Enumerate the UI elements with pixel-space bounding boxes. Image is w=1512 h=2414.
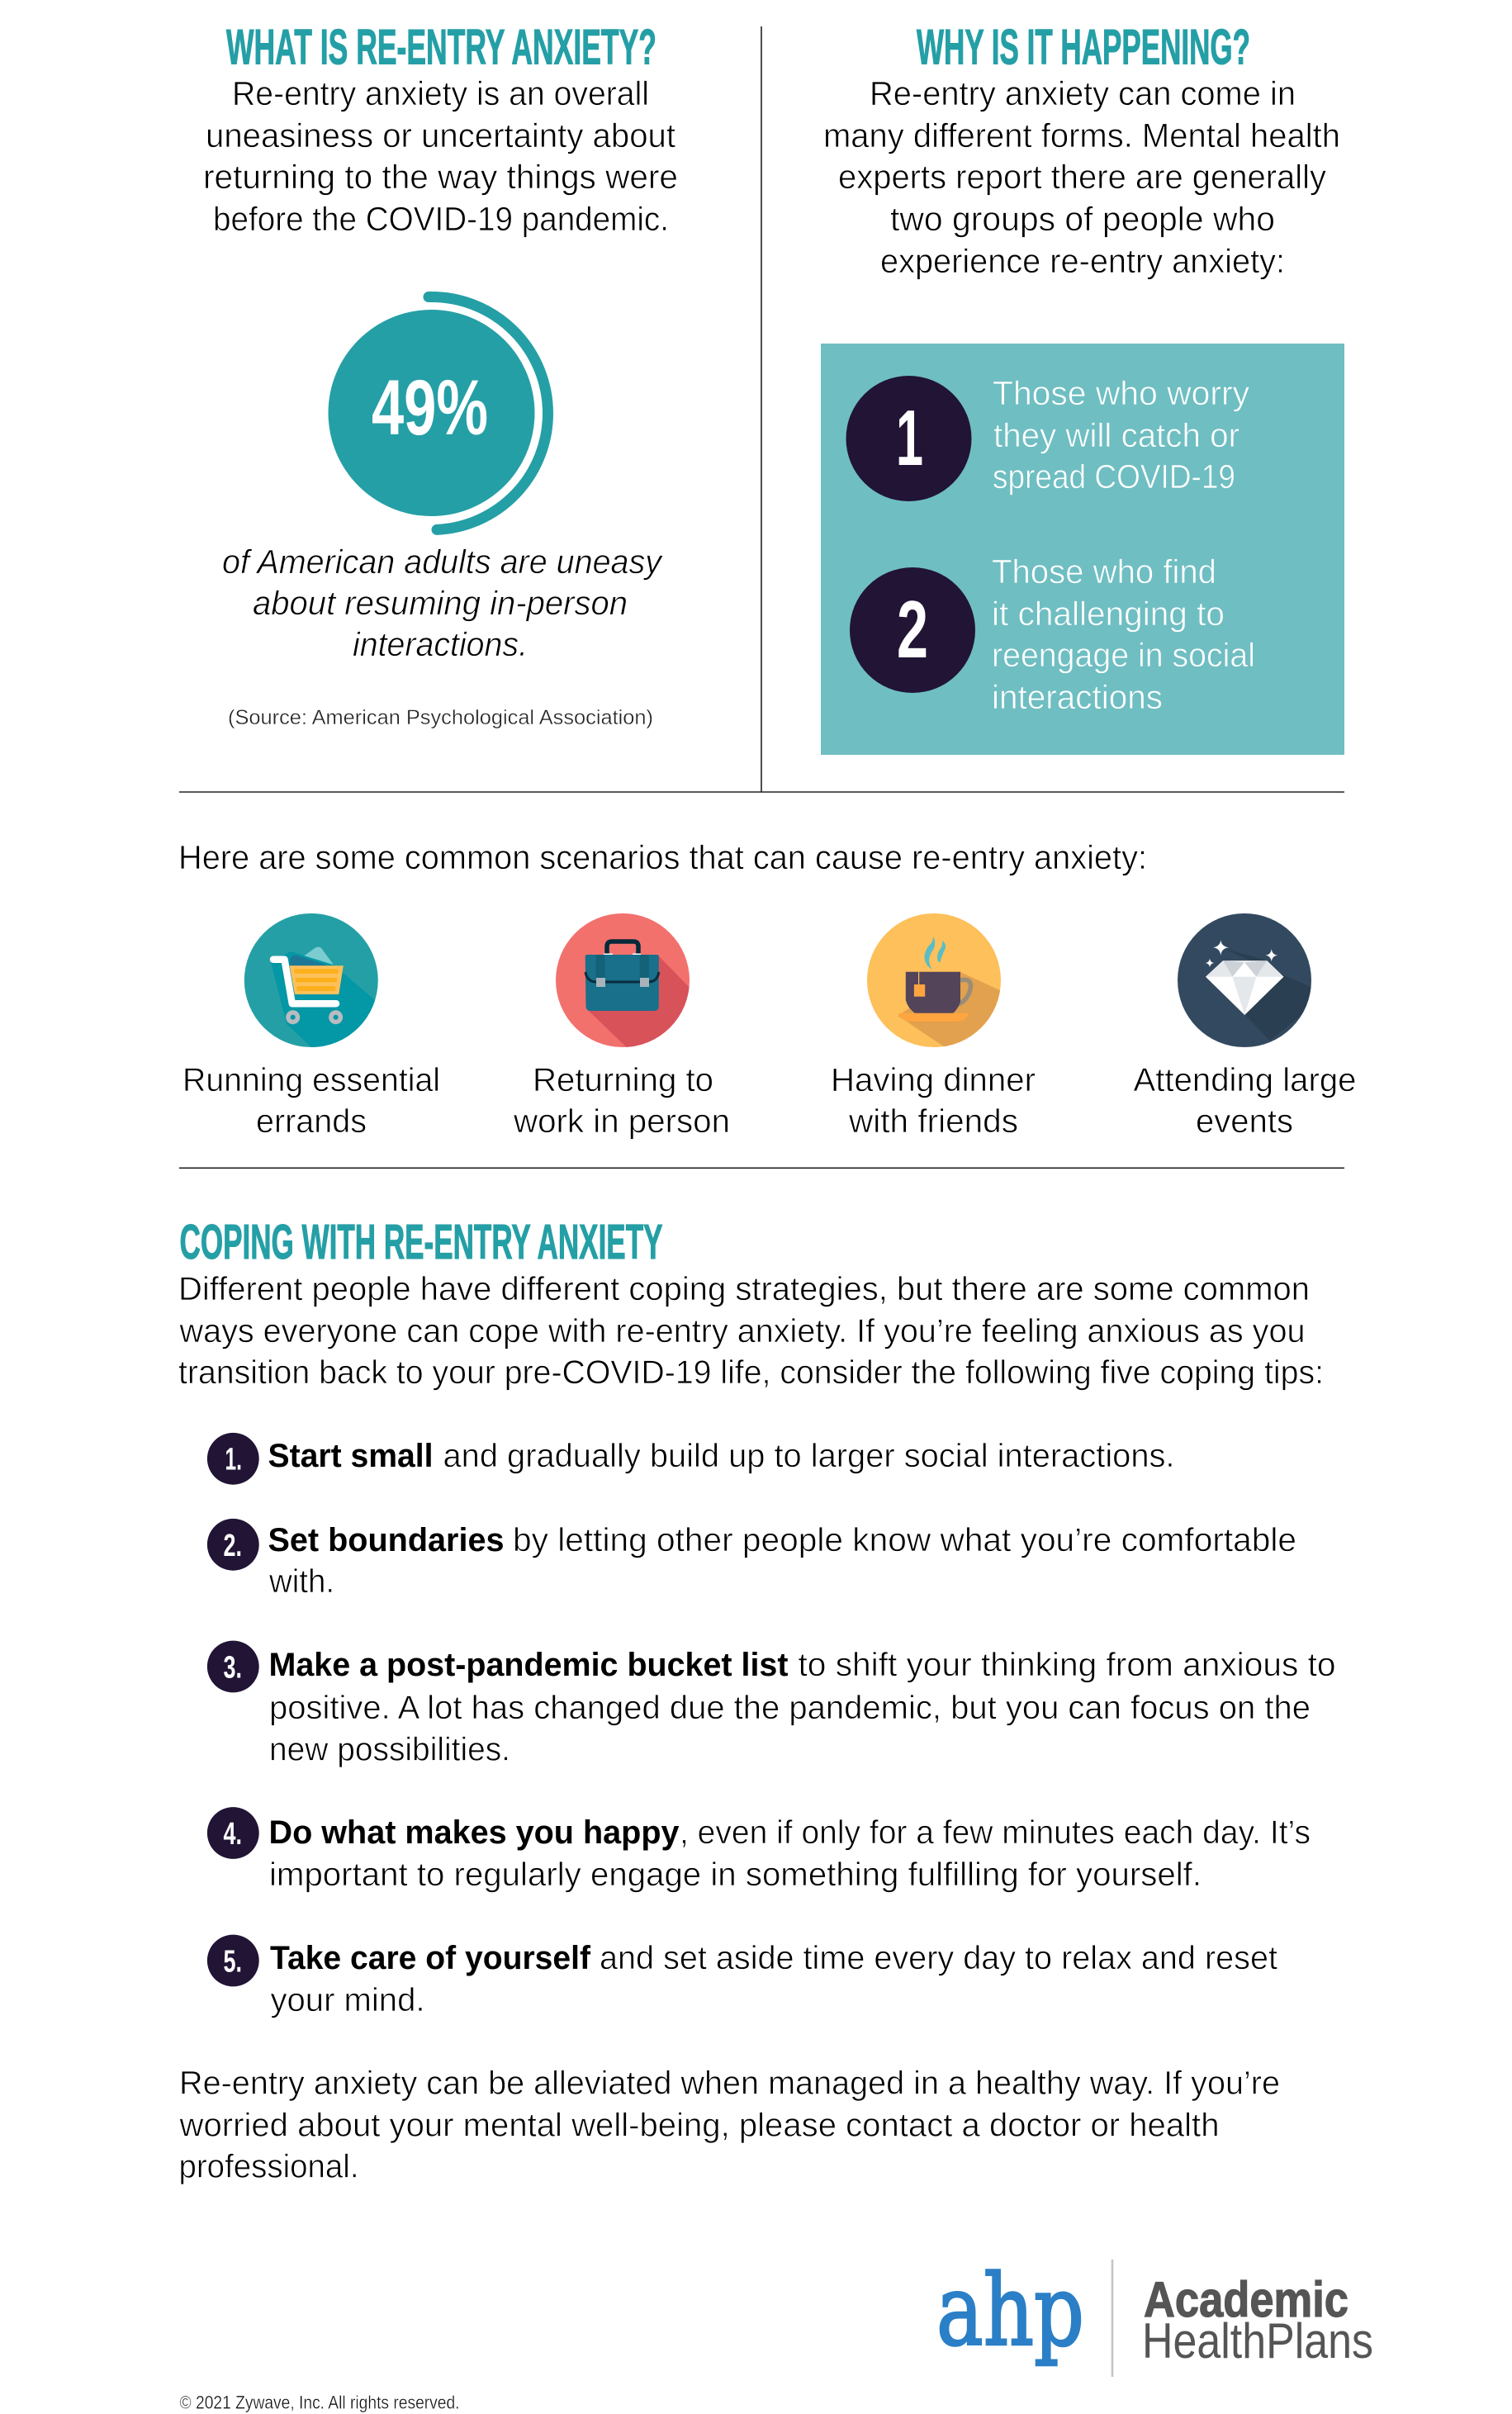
tip text: positive. A lot has changed due the pandemic, but you can focus on the <box>269 1690 1311 1726</box>
label <box>1133 1062 1356 1140</box>
text block: group 2: it challenging to <box>992 595 1225 633</box>
tip text: by letting other people know what you’re comfortable <box>513 1522 1296 1558</box>
tip 1 <box>207 1433 1174 1485</box>
tip text: important to regularly engage in something fulfilling for yourself. <box>269 1857 1202 1893</box>
tip text: your mind. <box>271 1982 424 2018</box>
text block: group 1: Those who worry <box>993 374 1249 412</box>
label: with friends <box>848 1103 1018 1140</box>
tip text: new possibilities. <box>269 1731 510 1767</box>
text block: coping intro: Different people have different coping strategies, but there are some common <box>178 1271 1310 1307</box>
text block: group 2: Those who find <box>992 553 1216 590</box>
tip text <box>269 1647 1336 1767</box>
text block: explanation <box>823 74 1340 280</box>
text block: explanation: experts report there are generally <box>838 158 1326 196</box>
text block: group 2 <box>992 553 1255 716</box>
label <box>831 1062 1036 1140</box>
label: Having dinner <box>831 1062 1036 1098</box>
tip text: to shift your thinking from anxious to <box>798 1647 1336 1683</box>
text block: statistic caption: of American adults are uneasy <box>222 543 663 581</box>
text block: definition: returning to the way things were <box>203 158 678 196</box>
text block: statistic caption: about resuming in-person <box>253 584 628 622</box>
text block: statistic caption <box>222 543 663 663</box>
label: Returning to <box>533 1062 713 1098</box>
tip text: and gradually build up to larger social interactions. <box>443 1438 1174 1474</box>
text block: closing paragraph <box>178 2065 1280 2185</box>
text block: group 1: spread COVID-19 <box>993 458 1235 496</box>
text block: explanation: two groups of people who <box>890 200 1275 238</box>
callout: two groups <box>821 344 1344 755</box>
icon: number 1 badge: 1. <box>225 1442 242 1477</box>
text block: group 1 <box>993 374 1249 496</box>
tip text: Do what makes you happy <box>269 1814 680 1851</box>
icon: number 1 <box>846 376 971 501</box>
tip 4 <box>207 1807 1311 1893</box>
label <box>513 1062 730 1140</box>
panel: why is it happening <box>821 20 1344 755</box>
icon: number 1: 1 <box>896 394 923 482</box>
tip 5 <box>207 1935 1277 2018</box>
icon: number 5 badge: 5. <box>223 1944 242 1979</box>
scenario: running essential errands <box>182 913 440 1140</box>
label <box>182 1062 440 1140</box>
text block: closing paragraph: Re-entry anxiety can be alleviated when managed in a healthy way. If you’re <box>179 2065 1280 2102</box>
icon: number 3 badge: 3. <box>223 1651 242 1686</box>
text block: explanation: Re-entry anxiety can come in <box>870 74 1296 112</box>
icon: number 1 badge <box>207 1433 259 1485</box>
label: errands <box>256 1103 367 1140</box>
logo: Academic HealthPlans <box>936 2255 1373 2377</box>
logo mark: ahp: ahp <box>936 2255 1084 2369</box>
heading: coping with re-entry anxiety: COPING WITH RE-ENTRY ANXIETY <box>180 1215 662 1269</box>
scenario: returning to work <box>513 913 730 1140</box>
heading: what is re-entry anxiety: WHAT IS RE-ENTRY ANXIETY? <box>226 20 656 74</box>
icon: diamond <box>1178 913 1316 1047</box>
icon: number 4 badge <box>207 1807 259 1859</box>
icon: tea cup <box>867 913 1001 1047</box>
heading: why is it happening: WHY IS IT HAPPENING? <box>917 20 1250 74</box>
icon: number 5 badge <box>207 1935 259 1986</box>
text block: group 1: they will catch or <box>993 416 1239 454</box>
label: work in person <box>513 1103 730 1140</box>
text block: definition: Re-entry anxiety is an overall <box>232 74 649 112</box>
icon: number 4 badge: 4. <box>223 1817 242 1852</box>
tip text: Set boundaries <box>268 1522 504 1558</box>
scenario: having dinner <box>831 913 1036 1140</box>
source note: (Source: American Psychological Association) <box>228 706 653 729</box>
text block: definition: before the COVID-19 pandemic. <box>213 200 669 238</box>
text block: coping intro: ways everyone can cope with re-entry anxiety. If you’re feeling anxious as you <box>179 1313 1305 1349</box>
copyright: © 2021 Zywave, Inc. All rights reserved. <box>180 2393 459 2413</box>
chart: 49 percent ring <box>329 296 548 529</box>
tip text <box>269 1814 1311 1893</box>
tip text <box>270 1940 1277 2018</box>
text block: explanation: experience re-entry anxiety: <box>880 242 1285 280</box>
text block: group 2: reengage in social <box>992 636 1255 674</box>
chart: 49 percent ring: 49% <box>372 364 488 452</box>
text block: explanation: many different forms. Mental health <box>823 116 1340 154</box>
text block: definition <box>203 74 678 238</box>
text block: coping intro <box>178 1271 1324 1391</box>
tip 3 <box>207 1641 1335 1767</box>
tip 2 <box>207 1519 1296 1600</box>
panel: what is re-entry anxiety <box>203 20 678 729</box>
tip text: Start small <box>268 1438 433 1474</box>
text block: scenarios intro: Here are some common scenarios that can cause re-entry anxiety: <box>178 838 1147 876</box>
text block: closing paragraph: worried about your mental well-being, please contact a doctor or health <box>178 2107 1220 2143</box>
icon: number 2: 2 <box>897 584 928 675</box>
text block: statistic caption: interactions. <box>353 625 528 663</box>
tip text: with. <box>268 1563 334 1600</box>
tip text: Take care of yourself <box>270 1940 591 1976</box>
icon: number 2 <box>850 567 975 693</box>
scenario: attending large events <box>1133 913 1356 1140</box>
logo wordmark: HealthPlans <box>1142 2313 1373 2369</box>
label: Running essential <box>182 1062 440 1098</box>
tip text: Make a post-pandemic bucket list <box>269 1647 788 1683</box>
icon: shopping cart <box>244 913 378 1047</box>
tip text: , even if only for a few minutes each day. It’s <box>680 1814 1311 1851</box>
tip text: and set aside time every day to relax and reset <box>600 1940 1277 1976</box>
icon: briefcase <box>556 913 690 1047</box>
logo wordmark: Academic <box>1144 2272 1348 2327</box>
logo wordmark <box>1142 2272 1373 2369</box>
icon: number 2 badge: 2. <box>223 1529 242 1563</box>
text block: definition: uneasiness or uncertainty about <box>206 116 676 154</box>
text block: coping intro: transition back to your pre-COVID-19 life, consider the following five coping tips: <box>178 1354 1324 1391</box>
icon: number 3 badge <box>207 1641 259 1692</box>
label: Attending large <box>1133 1062 1356 1098</box>
label: events <box>1196 1103 1293 1140</box>
icon: number 2 badge <box>207 1519 259 1571</box>
tip text <box>268 1522 1296 1600</box>
text block: group 2: interactions <box>992 678 1163 716</box>
text block: closing paragraph: professional. <box>178 2149 358 2185</box>
